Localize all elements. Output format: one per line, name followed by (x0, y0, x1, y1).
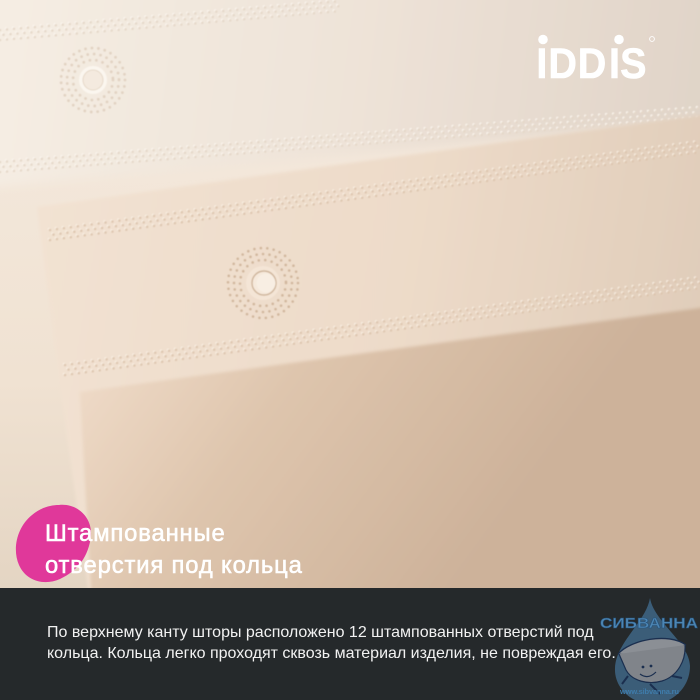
watermark name: СИБВАННА (600, 616, 699, 632)
front curtain sheet (37, 111, 700, 610)
logo: iddis: IDDIS (536, 39, 646, 87)
watermark url: www.sibvanna.ru (619, 687, 679, 696)
title: отверстия под кольца (45, 552, 303, 579)
body text: кольца. Кольца легко проходят сквозь материал изделия, не повреждая его. (47, 645, 616, 662)
title: Штампованные (45, 520, 226, 547)
title (45, 520, 303, 579)
stamped hole: front sheet (228, 248, 298, 318)
pink blob behind title (16, 505, 91, 582)
footer panel (0, 588, 700, 700)
body text: По верхнему канту шторы расположено 12 штампованных отверстий под (47, 624, 594, 641)
icon: water drop (615, 598, 690, 700)
stamped hole: back sheet (61, 48, 125, 112)
body text (47, 624, 616, 662)
lower curtain panel (80, 304, 700, 610)
icon: bathtub (618, 638, 686, 694)
